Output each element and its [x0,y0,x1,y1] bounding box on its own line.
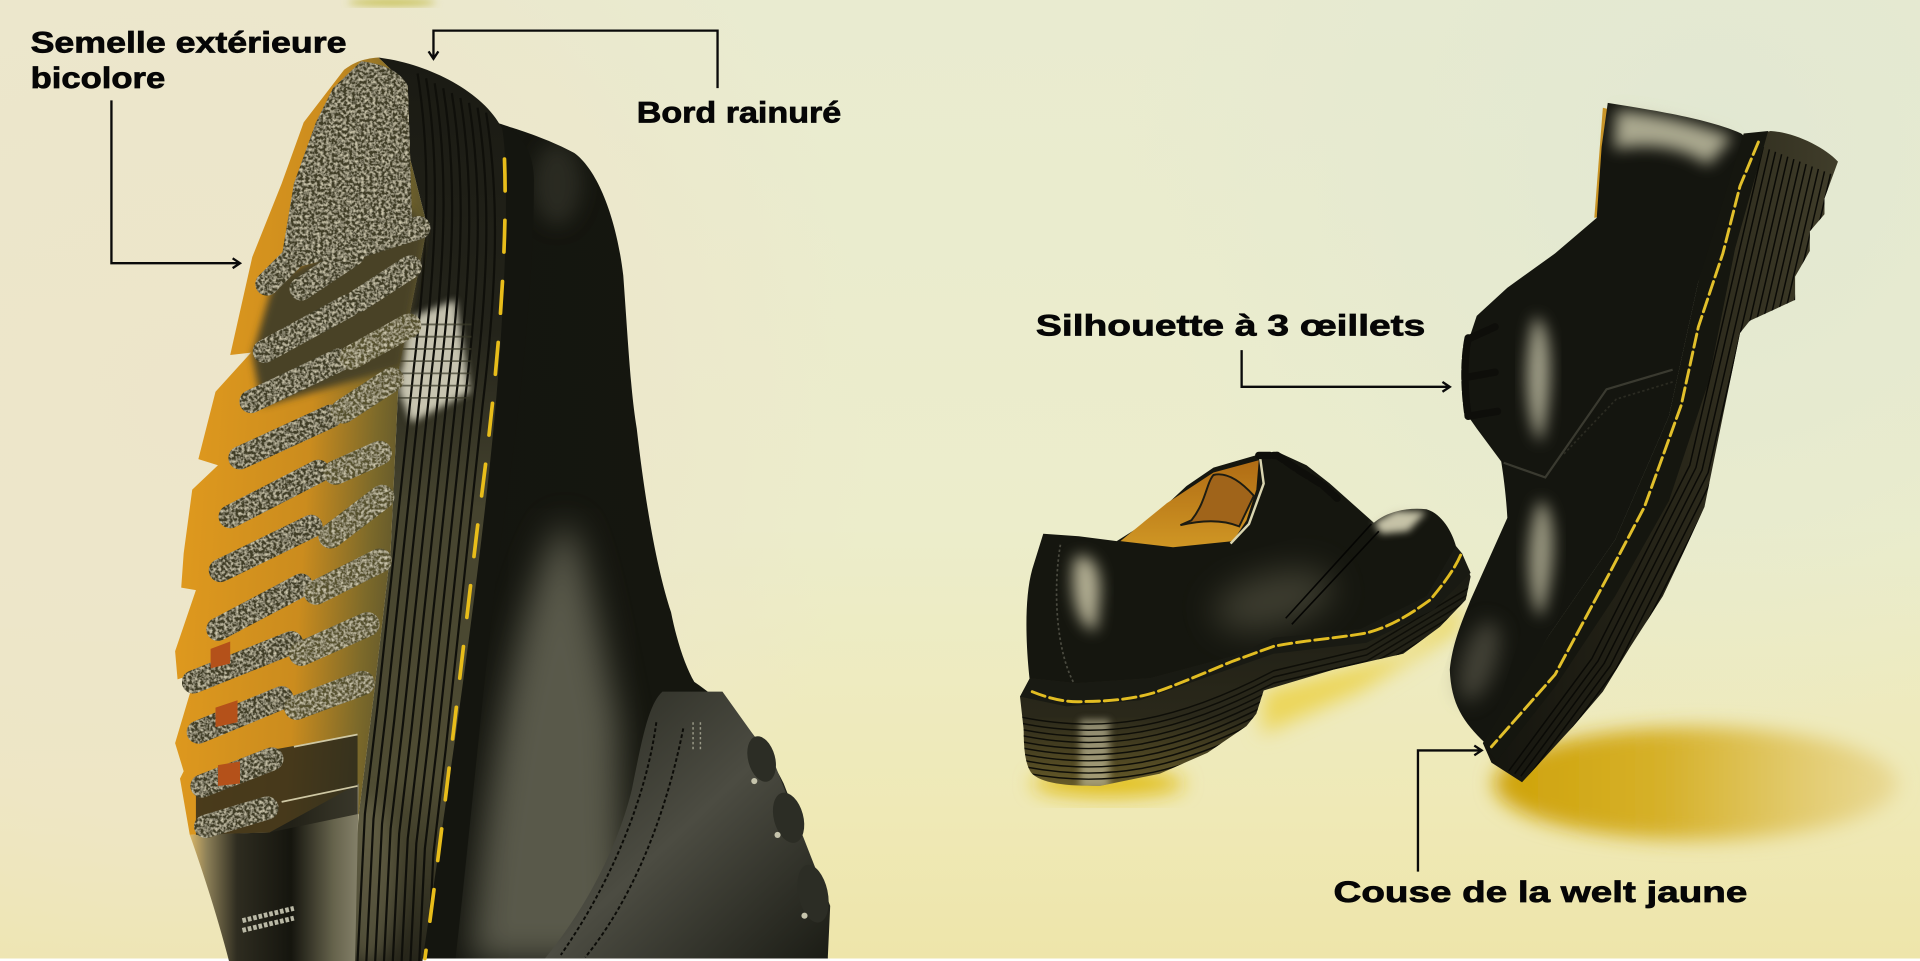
callout: Couse de la welt jaune [1333,746,1747,909]
sole [1483,131,1838,798]
welt [1483,131,1768,761]
top yellow spot [348,0,436,6]
yellow stitching [425,159,505,959]
stitching [1032,555,1461,702]
shadow: standing shoe [1032,600,1464,797]
arrow: yellow welt stitch [1418,746,1482,872]
upper [422,122,834,961]
callout: Silhouette à 3 œillets [1036,309,1450,392]
welt [1020,546,1471,706]
arrow: outsole [111,100,240,268]
callout: Semelle extérieure bicolore: Semelle extérieure [31,27,347,60]
facing with laces [545,692,834,959]
sole [1016,546,1471,788]
tread lugs [193,228,419,826]
laces [1259,455,1337,498]
tread [175,58,427,961]
toe texture [279,61,413,272]
hanging shoe [1450,103,1838,798]
upper [1450,103,1749,743]
callout: Semelle extérieure bicolore: bicolore [31,62,165,95]
large shoe, sole view [175,58,834,961]
brand mark [242,908,294,930]
callout: Semelle extérieure bicolore [31,27,347,268]
callout: Couse de la welt jaune: Couse de la welt jaune [1333,876,1747,909]
callout: Bord rainuré: Bord rainuré [637,96,841,129]
ribbed sole side [355,58,506,961]
tread shank [190,783,359,961]
arrow: grooved edge [429,31,718,88]
highlights [1057,510,1427,683]
callout: Bord rainuré [429,31,841,129]
upper [1026,452,1462,686]
laces [1465,327,1498,416]
lining strip [1594,108,1613,218]
callout: Silhouette à 3 œillets: Silhouette à 3 œillets [1036,309,1425,342]
lining [1120,460,1259,547]
shadow: hanging shoe [1494,727,1898,840]
stitching [1491,142,1758,747]
arrow: eyelets [1242,350,1450,392]
standing shoe [1016,452,1471,788]
welt band [416,122,534,959]
tread dark underlay [252,208,425,406]
